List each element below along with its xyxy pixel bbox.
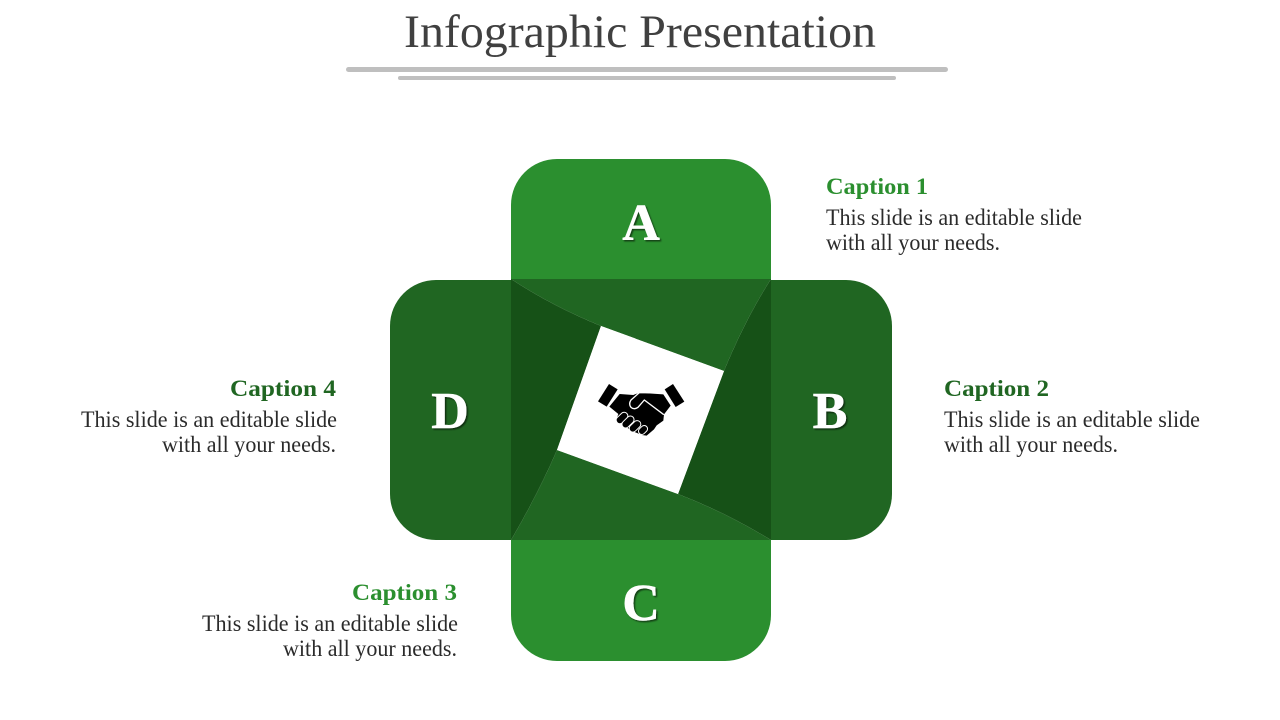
text block: caption 1 (826, 174, 1082, 256)
text block: caption 4 (81, 376, 337, 458)
centre white square (557, 326, 724, 494)
text block: caption 4: This slide is an editable slide (81, 407, 337, 433)
panel: C (511, 540, 771, 661)
fold: left (511, 279, 601, 540)
text block: caption 4: Caption 4 (230, 376, 337, 401)
centre folded square (511, 279, 771, 540)
text block: caption 2: with all your needs. (944, 432, 1118, 458)
text block: caption 1: Caption 1 (826, 174, 928, 199)
text block: caption 4: with all your needs. (162, 432, 336, 458)
letter B: B (813, 383, 847, 440)
text block: caption 3: with all your needs. (283, 636, 457, 662)
letter C: C (622, 575, 660, 632)
fold: right (678, 279, 771, 540)
text block: caption 2 (944, 376, 1200, 458)
text block: caption 3: Caption 3 (352, 580, 457, 605)
text block: caption 1: This slide is an editable slide (826, 205, 1082, 231)
title: Infographic Presentation (404, 7, 876, 58)
text block: caption 3 (202, 580, 458, 662)
title underline (346, 67, 948, 80)
text block: caption 2: Caption 2 (944, 376, 1049, 401)
fold: bottom (511, 450, 771, 540)
panel: D (390, 280, 511, 540)
text block: caption 3: This slide is an editable slide (202, 611, 458, 637)
icon: handshake (598, 384, 684, 436)
letter A: A (622, 195, 660, 252)
panel: A (511, 159, 771, 280)
letter D: D (431, 383, 469, 440)
text block: caption 2: This slide is an editable slide (944, 407, 1200, 433)
fold: top (511, 279, 771, 371)
text block: caption 1: with all your needs. (826, 230, 1000, 256)
panel: B (771, 280, 892, 540)
